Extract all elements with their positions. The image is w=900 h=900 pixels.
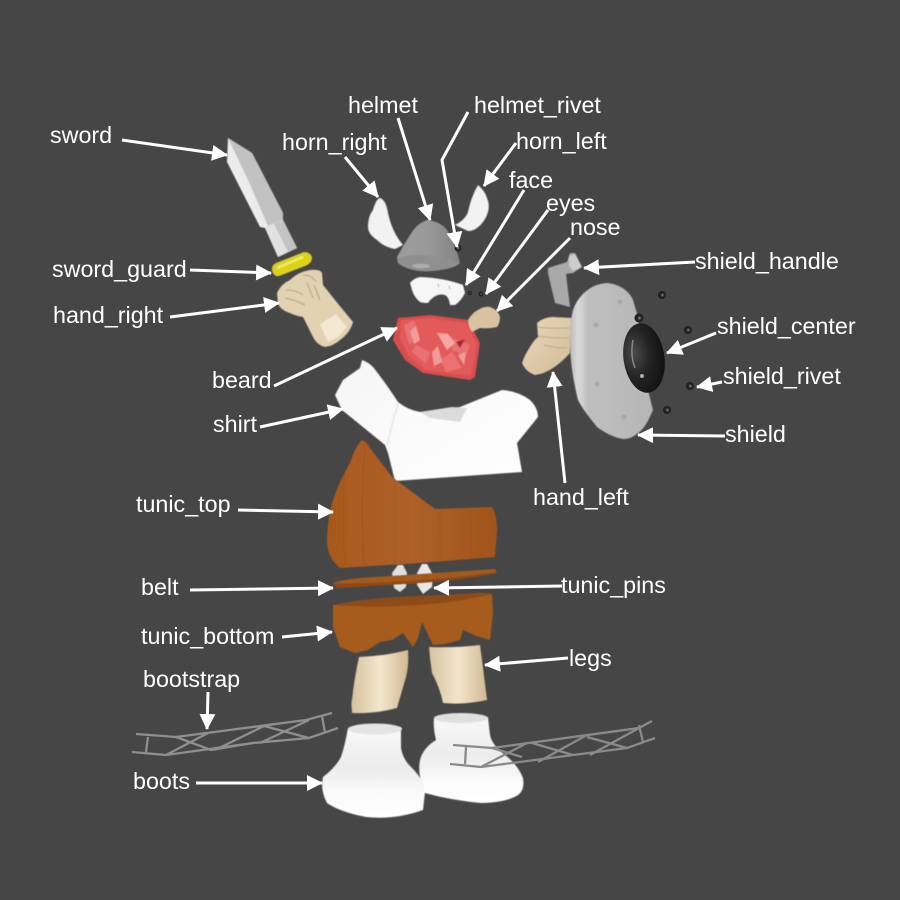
labels: tunic_top [136, 491, 231, 517]
labels: horn_right [282, 129, 387, 155]
arrows [122, 112, 725, 783]
icon: bootstrap left [132, 713, 338, 755]
icon: sword [227, 138, 297, 257]
labels: nose [570, 214, 621, 240]
labels: shield_rivet [723, 363, 841, 389]
labels: shield_center [717, 313, 856, 339]
icon: hand left [522, 317, 572, 375]
labels: beard [212, 367, 272, 393]
icon: bootstrap right [450, 721, 655, 767]
labels: hand_right [53, 302, 164, 328]
labels: tunic_pins [561, 572, 666, 598]
labels: shield [725, 421, 786, 447]
icon: face [410, 277, 465, 305]
icon: tunic top [327, 440, 497, 568]
labels: shirt [213, 411, 258, 437]
icon: belt [333, 569, 497, 588]
labels: shield_handle [695, 248, 839, 274]
icon: legs [352, 645, 487, 713]
labels: hand_left [533, 484, 629, 510]
labels: eyes [546, 190, 595, 216]
icon: shirt [335, 360, 538, 481]
icon: shield [570, 283, 653, 439]
icon: boots [322, 713, 523, 818]
labels: face [509, 167, 553, 193]
icon: beard [393, 315, 480, 380]
labels: horn_left [516, 128, 607, 154]
icon: shield rivets [634, 291, 694, 414]
labels: helmet [348, 92, 418, 118]
icon: nose [468, 307, 500, 332]
icon: tunic bottom [333, 593, 493, 653]
labels: belt [141, 574, 179, 600]
icon: hand right [277, 270, 353, 347]
labels: tunic_bottom [141, 623, 274, 649]
labels: legs [569, 645, 612, 671]
icon: horn left [455, 185, 489, 231]
icon: eyes [468, 291, 483, 296]
labels [50, 92, 856, 794]
icon: tunic pins [392, 564, 433, 594]
icon: shield center [619, 320, 669, 396]
labels: sword [50, 122, 112, 148]
labels: helmet_rivet [474, 92, 601, 118]
icon: horn right [368, 198, 403, 249]
labels: sword_guard [52, 256, 187, 282]
labels: boots [133, 768, 190, 794]
icon: helmet rivet [454, 244, 462, 252]
icon: shield handle [548, 253, 582, 307]
icon: sword guard [272, 252, 312, 276]
icon: helmet [397, 220, 460, 271]
labels: bootstrap [143, 666, 240, 692]
